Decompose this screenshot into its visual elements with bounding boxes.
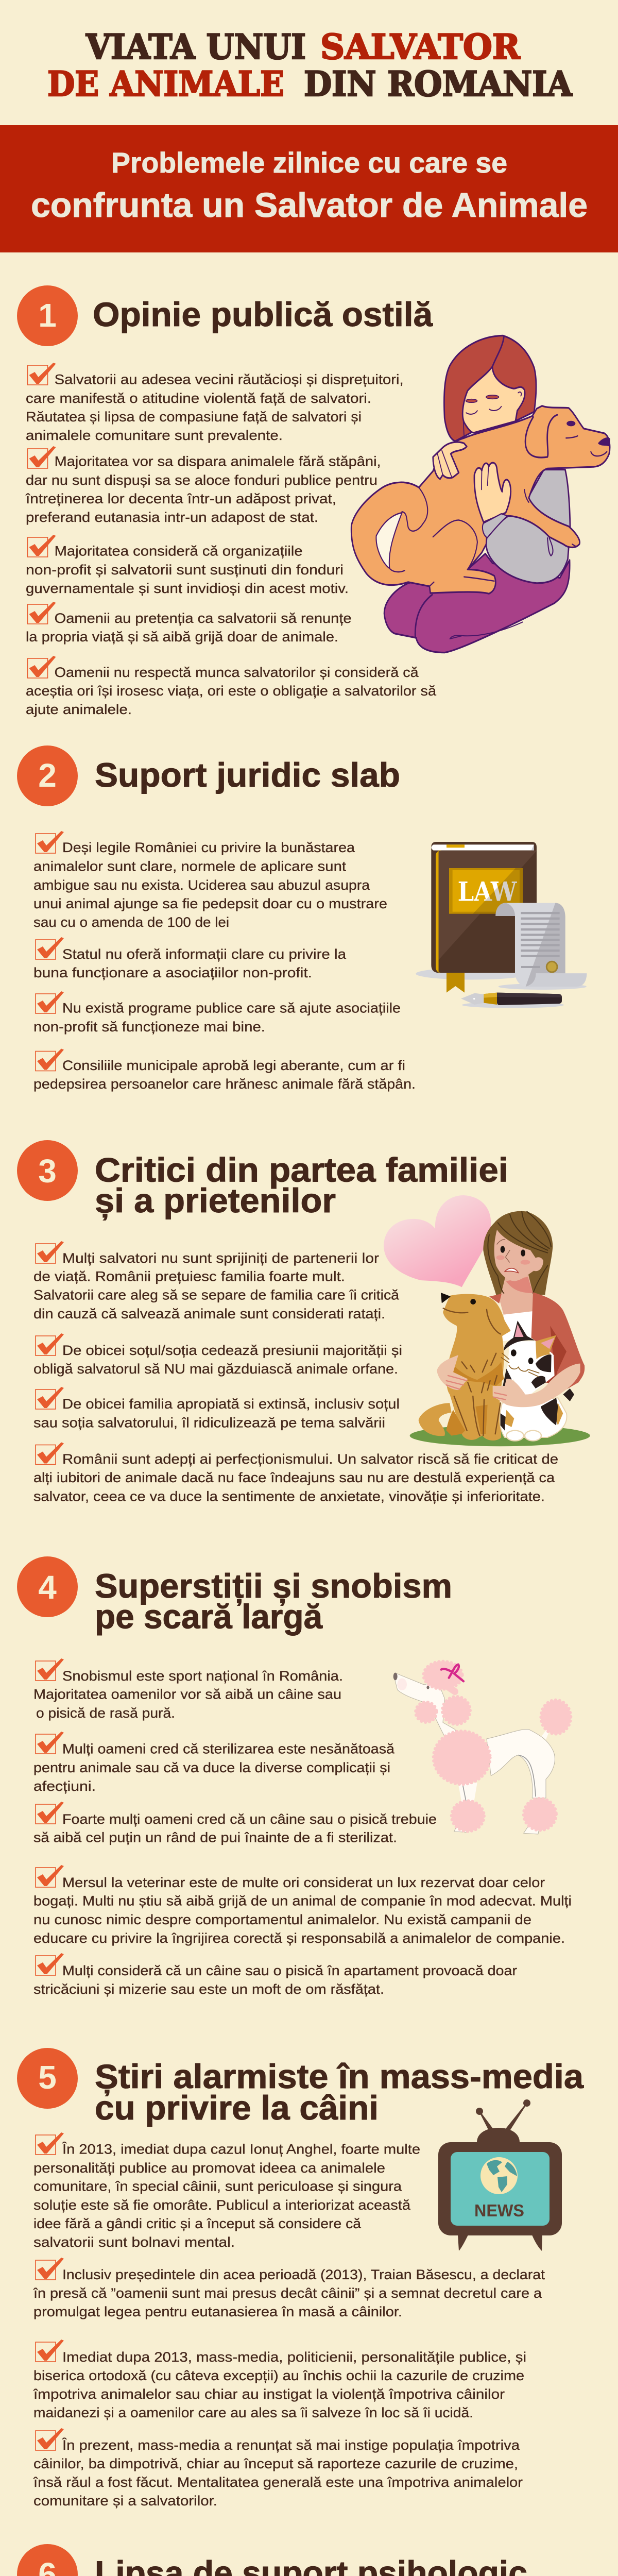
text block: item 3.1: Salvatorii care aleg să se separe de familia care îi critică [33,1287,400,1303]
number badge 1: 1 [38,297,57,334]
icon: checkbox [36,1658,64,1681]
heading 5: cu privire la câini [95,2089,379,2127]
icon: checkbox [36,2340,64,2362]
banner: subtitle: confrunta un Salvator de Animale [31,186,588,225]
text block: item 5.2 [33,2258,545,2319]
text block: item 2.3: non-profit să funcționeze mai bine. [33,1019,265,1035]
number badge 3: 3 [38,1153,57,1190]
icon: checkbox [36,1953,64,1975]
banner: subtitle: Problemele zilnice cu care se [111,146,507,179]
text block: item 1.1: care manifestă o atitudine violentă față de salvatori. [26,391,371,406]
text block: item 5.1: idee fără a gândi critic și a început să considere că [33,2216,362,2231]
text block: item 4.5 [33,1953,517,1997]
text block: item 5.4: câinilor, ba dimpotrivă, chiar au început să raporteze cazurile de cruzime, [33,2456,518,2471]
text block: item 5.4: În prezent, mass-media a renunțat să mai instige populația împotriva [62,2437,520,2453]
text block: item 4.4: nu cunosc nimic despre comportamentul animalelor. Nu există campanii de [33,1912,531,1927]
icon: checkbox [36,1387,64,1409]
text block: item 5.1: În 2013, imediat dupa cazul Ionuț Anghel, foarte multe [62,2141,420,2157]
title [47,27,573,104]
text block: item 1.3: guvernamentale și sunt invidioși din acest motiv. [26,581,349,596]
icon: checkbox [28,363,56,385]
panel: section 4 superstitii si snobism [17,1556,572,1997]
text block: item 3.3: sau soția salvatorului, îl ridiculizează pe tema salvării [33,1415,385,1431]
text block: item 5.1: soluție este să fie omorâte. Publicul a interiorizat această [33,2197,411,2213]
number badge 6 [17,2544,78,2576]
heading 4: Superstiții și snobism [95,1567,452,1606]
text block: item 3.4: salvator, ceea ce va duce la sentimente de anxietate, vinovăție și inferioritate. [33,1489,545,1504]
text block: item 4.3: Foarte mulți oameni cred că un câine sau o pisică trebuie [62,1811,437,1827]
text block: item 5.3: împotriva animalelor sau chiar au instigat la violență împotriva câinilor [33,2386,505,2402]
text block: item 3.4 [33,1443,558,1504]
text block: item 4.2: pentru animale sau că va duce la diverse complicații și [33,1760,390,1775]
number badge 5 [17,2048,78,2109]
text block: item 3.3 [33,1387,400,1431]
text block: item 5.3: Imediat dupa 2013, mass-media, politicienii, personalitățile publice, și [62,2349,526,2365]
text block: item 5.4: însă răul a fost făcut. Mentalitatea generală este una împotriva animalelor [33,2475,523,2490]
text block: item 1.1: Răutatea și lipsa de compasiune față de salvatori și [26,409,362,425]
text block: item 2.4: pedepsirea persoanelor care hrănesc animale fără stăpân. [33,1076,416,1092]
number badge 2: 2 [38,757,57,794]
text block: item 5.4: comunitare și a salvatorilor. [33,2493,217,2509]
heading 3: și a prietenilor [95,1181,336,1221]
text block: item 3.3: De obicei familia apropiată si extinsă, inclusiv soțul [62,1396,400,1412]
number badge 1 [17,285,78,346]
text block: item 1.2: Majoritatea vor sa dispara animalele fără stăpâni, [55,454,381,469]
text block: item 4.4 [33,1865,572,1946]
number badge 2 [17,745,78,806]
text block: item 3.1 [33,1241,400,1321]
text block: item 5.3: biserica ortodoxă (cu câteva excepții) au închis ochii la cazurile de cruzime [33,2368,524,2383]
text block: item 4.5: Mulți consideră că un câine sau o pisică în apartament provoacă doar [62,1963,517,1978]
icon: retro tv with news: NEWS [474,2201,524,2220]
icon: checkbox [36,2428,64,2450]
illustration: pink poodle [393,1662,571,1834]
icon: checkbox [36,1802,64,1824]
banner: subtitle [0,125,618,252]
panel: section 6 lipsa de suport psihologic [17,2544,605,2576]
icon: checkbox [28,446,56,468]
text block: item 4.4: Mersul la veterinar este de multe ori considerat un lux rezervat doar celor [62,1875,545,1890]
text block: item 1.1: Salvatorii au adesea vecini răutăcioși și disprețuitori, [55,372,404,387]
text block: item 4.1: Majoritatea oamenilor vor să aibă un câine sau [33,1687,341,1702]
illustration: woman hugging dog [351,335,610,653]
text block: item 3.1: din cauză că salvează animale sunt considerati ratați. [33,1306,385,1321]
illustration: law book, scroll and pen [416,842,587,1008]
heading 1: Opinie publică ostilă [93,295,433,333]
panel: section 5 stiri alarmiste [17,2048,584,2509]
icon: retro tv with news [438,2099,562,2251]
text block: item 1.4: Oamenii au pretenția ca salvatorii să renunțe [55,611,352,626]
text block: item 1.5: ajute animalele. [26,702,132,717]
text block: item 3.4: alți iubitori de animale dacă nu face îndeajuns sau nu are destulă experiență ca [33,1470,555,1485]
text block: item 2.1: sau cu o amenda de 100 de lei [33,914,229,930]
icon: checkbox [36,1333,64,1355]
icon: checkbox [36,1241,64,1263]
text block: item 5.3: maidanezi și a oamenilor care au ales sa îi salveze în loc să îi ucidă. [33,2405,473,2420]
panel: section 1 opinie publica ostila [17,285,610,717]
text block: item 4.2: afecțiuni. [33,1778,96,1794]
icon: checkbox [36,831,64,853]
title: SALVATOR [320,27,521,67]
icon: checkbox [36,1443,64,1464]
text block: item 5.4 [33,2428,523,2509]
text block: item 5.1: comunitare, în special câinii, sunt periculoase și singura [33,2179,402,2194]
text block: item 5.2: Inclusiv președintele din acea perioadă (2013), Traian Băsescu, a declarat [62,2267,545,2282]
text block: item 1.4: la propria viață și să aibă grijă doar de animale. [26,629,338,645]
panel: section 3 critici din partea familiei [17,1140,590,1504]
text block: item 1.3: non-profit și salvatorii sunt susținuti din fonduri [26,562,344,578]
number badge 4 [17,1556,78,1617]
text block: item 1.1: animalele comunitare sunt prevalente. [26,428,283,443]
text block: item 2.1: ambigue sau nu exista. Uciderea sau abuzul asupra [33,877,370,893]
text block: item 2.1: unui animal ajunge sa fie pedepsit doar cu o mustrare [33,896,387,911]
text block: item 1.3: Majoritatea consideră că organizațiile [55,544,303,559]
text block: item 1.5 [26,656,437,717]
number badge 3 [17,1140,78,1201]
icon: checkbox [36,1865,64,1887]
icon: checkbox [28,602,56,624]
text block: item 5.1: personalități publice au promovat ideea ca animalele [33,2160,385,2176]
text block: item 5.1: salvatorii sunt bolnavi mental. [33,2234,235,2250]
text block: item 5.2: promulgat legea pentru eutanasierea în masă a câinilor. [33,2304,402,2319]
text block: item 3.1: de viață. Românii prețuiesc familia foarte mult. [33,1268,345,1284]
text block: item 4.1: Snobismul este sport național în România. [62,1668,343,1684]
text block: item 3.2: De obicei soțul/soția cedează presiunii majorității și [62,1343,402,1358]
number badge 4: 4 [38,1569,57,1606]
heading 3: Critici din partea familiei [95,1151,508,1189]
text block: item 2.2: buna funcționare a asociațiilor non-profit. [33,965,312,980]
text block: item 5.3 [33,2340,526,2420]
text block: item 4.5: stricăciuni și mizerie sau este un moft de om răsfățat. [33,1981,384,1997]
text block: item 1.3 [26,535,349,596]
icon: checkbox [28,656,56,678]
text block: item 2.1 [33,831,387,930]
text block: item 2.2: Statul nu oferă informații clare cu privire la [62,946,347,962]
text block: item 4.3 [33,1802,437,1845]
text block: item 2.4: Consiliile municipale aprobă legi aberante, cum ar fi [62,1058,405,1073]
text block: item 1.5: Oamenii nu respectă munca salvatorilor și consideră că [55,665,419,680]
text block: item 4.1: o pisică de rasă pură. [36,1705,175,1721]
text block: item 1.5: aceștia ori își irosesc viața, ori este o obligație a salvatorilor să [26,683,437,699]
text block: item 4.4: bogați. Multi nu știu să aibă grijă de un animal de companie în mod adecvat. Mulți [33,1893,572,1909]
text block: item 1.2: întreținerea lor decenta într-un adăpost privat, [25,491,336,506]
icon: checkbox [36,1732,64,1754]
text block: item 3.2: obligă salvatorul să NU mai găzduiască animale orfane. [33,1361,398,1377]
title: DIN ROMANIA [304,64,573,104]
icon: checkbox [36,991,64,1013]
title: VIATA UNUI [85,27,306,67]
text block: item 2.1: animalelor sunt clare, normele de aplicare sunt [33,858,347,874]
text block: item 3.1: Mulți salvatori nu sunt sprijiniți de partenerii lor [62,1250,379,1266]
text block: item 1.4 [26,602,352,645]
heading 3 [95,1151,508,1221]
text block: item 3.2 [33,1333,402,1377]
panel: section 2 suport juridic slab [17,745,587,1092]
heading 4: pe scară largă [95,1597,323,1635]
text block: item 2.4 [33,1049,416,1092]
text block: item 4.2: Mulți oameni cred că sterilizarea este nesănătoasă [62,1741,395,1757]
text block: item 2.1: Deși legile României cu privire la bunăstarea [62,840,355,855]
text block: item 2.3: Nu există programe publice care să ajute asociațiile [62,1001,401,1016]
text block: item 3.4: Românii sunt adepți ai perfecționismului. Un salvator riscă să fie criticat de [62,1451,558,1467]
text block: item 1.2 [25,446,381,525]
illustration: law book, scroll and pen: LAW [458,876,517,907]
text block: item 2.2 [33,937,347,980]
text block: item 1.1 [26,363,404,443]
icon: checkbox [36,1049,64,1071]
heading 2: Suport juridic slab [95,756,400,794]
heading 5 [95,2057,584,2127]
text block: item 4.4: educare cu privire la îngrijirea corectă și responsabilă a animalelor de companie. [33,1930,565,1946]
icon: checkbox [36,937,64,959]
icon: checkbox [28,535,56,557]
text block: item 4.3: să aibă cel puțin un rând de pui înainte de a fi sterilizat. [33,1830,397,1845]
illustration: worried woman with dog, cat and heart [384,1195,590,1446]
number badge 5: 5 [38,2059,57,2096]
heading 4 [95,1567,452,1635]
text block: item 2.3 [33,991,401,1035]
text block: item 1.2: dar nu sunt dispuși sa se aloce fonduri publice pentru [26,472,377,488]
text block: item 1.2: preferand eutanasia intr-un adapost de stat. [26,510,318,525]
text block: item 4.2 [33,1732,395,1794]
text block: item 5.2: în presă că ”oamenii sunt mai presus decât câinii” și a semnat decretul care a [33,2285,542,2301]
title: DE ANIMALE [47,64,284,104]
heading 5: Știri alarmiste în mass-media [95,2057,584,2096]
icon: checkbox [36,2258,64,2280]
icon: checkbox [36,2132,64,2155]
text block: item 4.1 [33,1658,343,1721]
text block: item 5.1 [33,2132,420,2250]
